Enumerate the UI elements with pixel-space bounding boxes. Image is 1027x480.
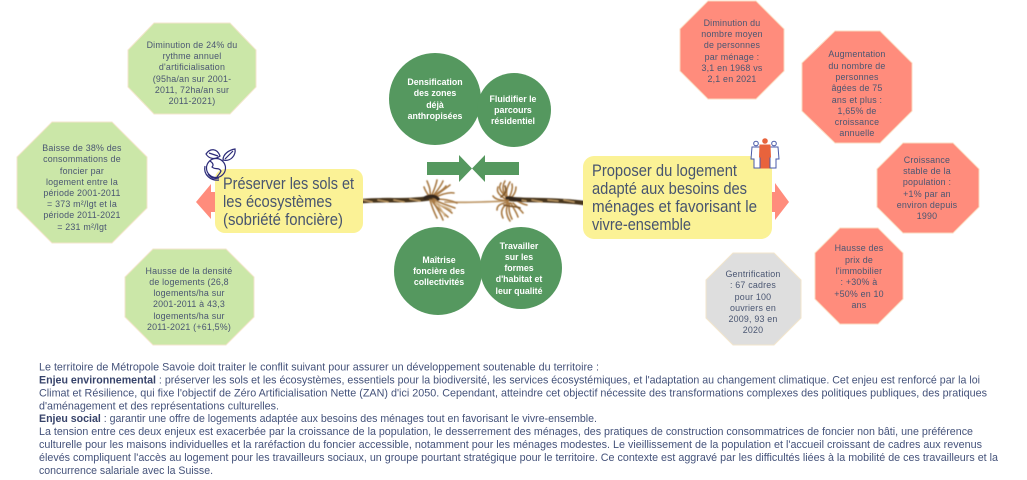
- text block: explanation: Enjeu environnemental : préserver les sols et les écosystèmes, essentiels pour la biodiversité, les services écosystémiques, et l'adaptation au changement climatique. Cet enjeu est renforcé par la loi: [39, 374, 980, 386]
- red octagon: property prices: prix de: [845, 255, 873, 265]
- green octagon: housing density: logements/ha sur: [153, 288, 225, 298]
- circle: housing forms: formes: [504, 263, 534, 273]
- red octagon: property prices: Hausse des: [835, 243, 884, 253]
- text block: explanation: Climat et Résilience, qui fixe l'objectif de Zéro Artificialisation Nette (ZAN) d'ici 2050. Cependant, atteindre cet objectif nécessite des transformations complexes des politiques publiques, des pratiques: [39, 388, 987, 400]
- arrow: pointing right: [427, 155, 472, 182]
- red octagon: population growth: +1% par an: [903, 189, 951, 199]
- panel: levers top circles: [389, 53, 551, 147]
- circle: residential path: [477, 73, 551, 147]
- panel: levers bottom circles: [394, 227, 562, 315]
- red octagon: property prices: l'immobilier: [836, 266, 882, 276]
- red octagon: ageing: 1,65% de: [837, 106, 877, 116]
- grey octagon: gentrification: Gentrification: [725, 269, 781, 279]
- red octagon: population growth: 1990: [917, 211, 937, 221]
- panel: left heading: Préserver les sols et: [223, 175, 354, 193]
- red octagon: property prices: ans: [852, 300, 867, 310]
- red octagon: ageing: personnes: [835, 72, 879, 82]
- green octagon: housing density: 2001-2011 à 43,3: [153, 299, 225, 309]
- icon: group of people: [751, 139, 779, 168]
- circle: land control: collectivités: [414, 277, 464, 287]
- grey octagon: gentrification: 2020: [743, 325, 763, 335]
- text block: explanation: Enjeu social : garantir une offre de logements adaptée aux besoins des ménages tout en favorisant le vivre-ensemble.: [39, 413, 597, 425]
- green octagon: housing density: logements/ha sur: [153, 311, 225, 321]
- red octagon: household size: Diminution du: [704, 18, 760, 28]
- green octagon: foncier consumption: période 2001-2011: [43, 188, 121, 198]
- circle: densification: Densification: [407, 77, 463, 87]
- panel: environmental facts: [17, 23, 256, 345]
- panel: left heading: les écosystèmes: [223, 193, 332, 211]
- green octagon: artificialisation: [128, 23, 256, 114]
- green octagon: foncier consumption: = 373 m²/lgt et la: [47, 199, 117, 209]
- rope: frayed in the middle: [363, 180, 584, 221]
- red octagon: population growth: environ depuis: [897, 200, 958, 210]
- circle: land control: foncière des: [413, 266, 465, 276]
- panel: right heading: Proposer du logement: [592, 162, 737, 180]
- circle: land control: Maîtrise: [422, 255, 456, 265]
- red octagon: household size: 3,1 en 1968 vs: [701, 63, 763, 73]
- green octagon: artificialisation: Diminution de 24% du: [147, 40, 237, 50]
- red octagon: property prices: : +30% à: [841, 277, 877, 287]
- green octagon: artificialisation: rythme annuel: [163, 51, 221, 61]
- text block: explanation: La tension entre ces deux enjeux est exacerbée par la croissance de la population, le desserrement des ménages, des pratiques de construction consommatrices de foncier non bâti, une préférence: [39, 426, 973, 438]
- green octagon: housing density: 2011-2021 (+61,5%): [147, 322, 231, 332]
- circle: densification: anthropisées: [408, 111, 462, 121]
- circle: residential path: Fluidifier le: [490, 94, 537, 104]
- red octagon: ageing: annuelle: [839, 128, 875, 138]
- text block: explanation: [39, 362, 998, 477]
- green octagon: foncier consumption: = 231 m²/lgt: [57, 222, 107, 232]
- circle: densification: des zones: [414, 88, 456, 98]
- green octagon: housing density: Hausse de la densité: [146, 266, 232, 276]
- circle: housing forms: Travailler: [500, 241, 539, 251]
- red octagon: household size: nombre moyen: [701, 29, 763, 39]
- arrow: right: [772, 183, 789, 220]
- circle: housing forms: sur les: [505, 252, 533, 262]
- green octagon: housing density: [125, 249, 254, 345]
- panel: social facts: [680, 1, 979, 345]
- green octagon: foncier consumption: foncier par: [60, 166, 104, 176]
- green octagon: artificialisation: (95ha/an sur 2001-: [153, 74, 231, 84]
- arrow: pointing left: [472, 155, 519, 182]
- red octagon: household size: par ménage :: [705, 52, 759, 62]
- text block: explanation: culturelle pour les maisons individuelles et la raréfaction du foncier accessible, notamment pour les ménages modestes. Le vieillissement de la population et l'accueil croissant de cadres aux revenus: [39, 439, 982, 451]
- green octagon: foncier consumption: logement entre la: [46, 177, 118, 187]
- text block: explanation: concurrence salariale avec la Suisse.: [39, 465, 213, 477]
- circle: densification: [389, 53, 481, 145]
- icon: globe with leaves: [205, 149, 235, 180]
- circle: land control: [394, 227, 482, 315]
- red octagon: population growth: [877, 143, 979, 233]
- grey octagon: gentrification: [706, 253, 801, 345]
- green octagon: foncier consumption: période 2011-2021: [43, 210, 121, 220]
- red octagon: population growth: stable de la: [903, 166, 951, 176]
- red octagon: property prices: [815, 228, 903, 324]
- green octagon: foncier consumption: Baisse de 38% des: [42, 143, 122, 153]
- red octagon: ageing: âgées de 75: [831, 83, 883, 93]
- arrow: left: [196, 184, 218, 219]
- circle: residential path: résidentiel: [491, 116, 535, 126]
- circle: residential path: parcours: [494, 105, 532, 115]
- red octagon: population growth: Croissance: [904, 155, 950, 165]
- text block: explanation: élevés compliquent l'accès au logement pour les travailleurs sociaux, un groupe pourtant stratégique pour le territoire. Ce contexte est aggravé par les difficultés liées à la mobilité de ces travailleurs et la: [39, 452, 998, 464]
- green octagon: foncier consumption: [17, 122, 147, 243]
- red octagon: household size: de personnes: [704, 40, 760, 50]
- panel: left heading: [215, 169, 363, 233]
- red octagon: household size: [680, 1, 784, 99]
- panel: right heading: adapté aux besoins des: [592, 180, 747, 198]
- text block: explanation: d'aménagement et des représentations culturelles.: [39, 400, 279, 412]
- circle: housing forms: leur qualité: [496, 286, 543, 296]
- circle: housing forms: d'habitat et: [496, 274, 542, 284]
- panel: right heading: ménages et favorisant le: [592, 198, 757, 216]
- red octagon: ageing: Augmentation: [828, 49, 886, 59]
- grey octagon: gentrification: ouvriers en: [730, 303, 776, 313]
- green octagon: artificialisation: 2011, 72ha/an sur: [155, 85, 229, 95]
- green octagon: artificialisation: d'artificialisation: [159, 62, 225, 72]
- text block: explanation: Le territoire de Métropole Savoie doit traiter le conflit suivant pour assurer un développement soutenable du territoire :: [39, 362, 599, 374]
- red octagon: household size: 2,1 en 2021: [707, 74, 757, 84]
- red octagon: ageing: [802, 31, 912, 143]
- grey octagon: gentrification: 2009, 93 en: [728, 314, 778, 324]
- red octagon: property prices: +50% en 10: [834, 289, 884, 299]
- panel: left heading: (sobriété foncière): [223, 211, 343, 229]
- red octagon: ageing: du nombre de: [828, 61, 886, 71]
- green octagon: foncier consumption: consommations de: [43, 154, 121, 164]
- panel: right heading: vivre-ensemble: [592, 216, 691, 234]
- grey octagon: gentrification: pour 100: [735, 292, 771, 302]
- green octagon: artificialisation: 2011-2021): [169, 96, 215, 106]
- green octagon: housing density: de logements (26,8: [149, 277, 229, 287]
- circle: densification: déjà: [426, 100, 444, 110]
- grey octagon: gentrification: : 67 cadres: [730, 280, 776, 290]
- red octagon: ageing: ans et plus :: [832, 95, 882, 105]
- red octagon: population growth: population :: [903, 177, 951, 187]
- panel: right heading: [583, 156, 772, 239]
- red octagon: ageing: croissance: [835, 117, 879, 127]
- circle: housing forms: [480, 227, 562, 309]
